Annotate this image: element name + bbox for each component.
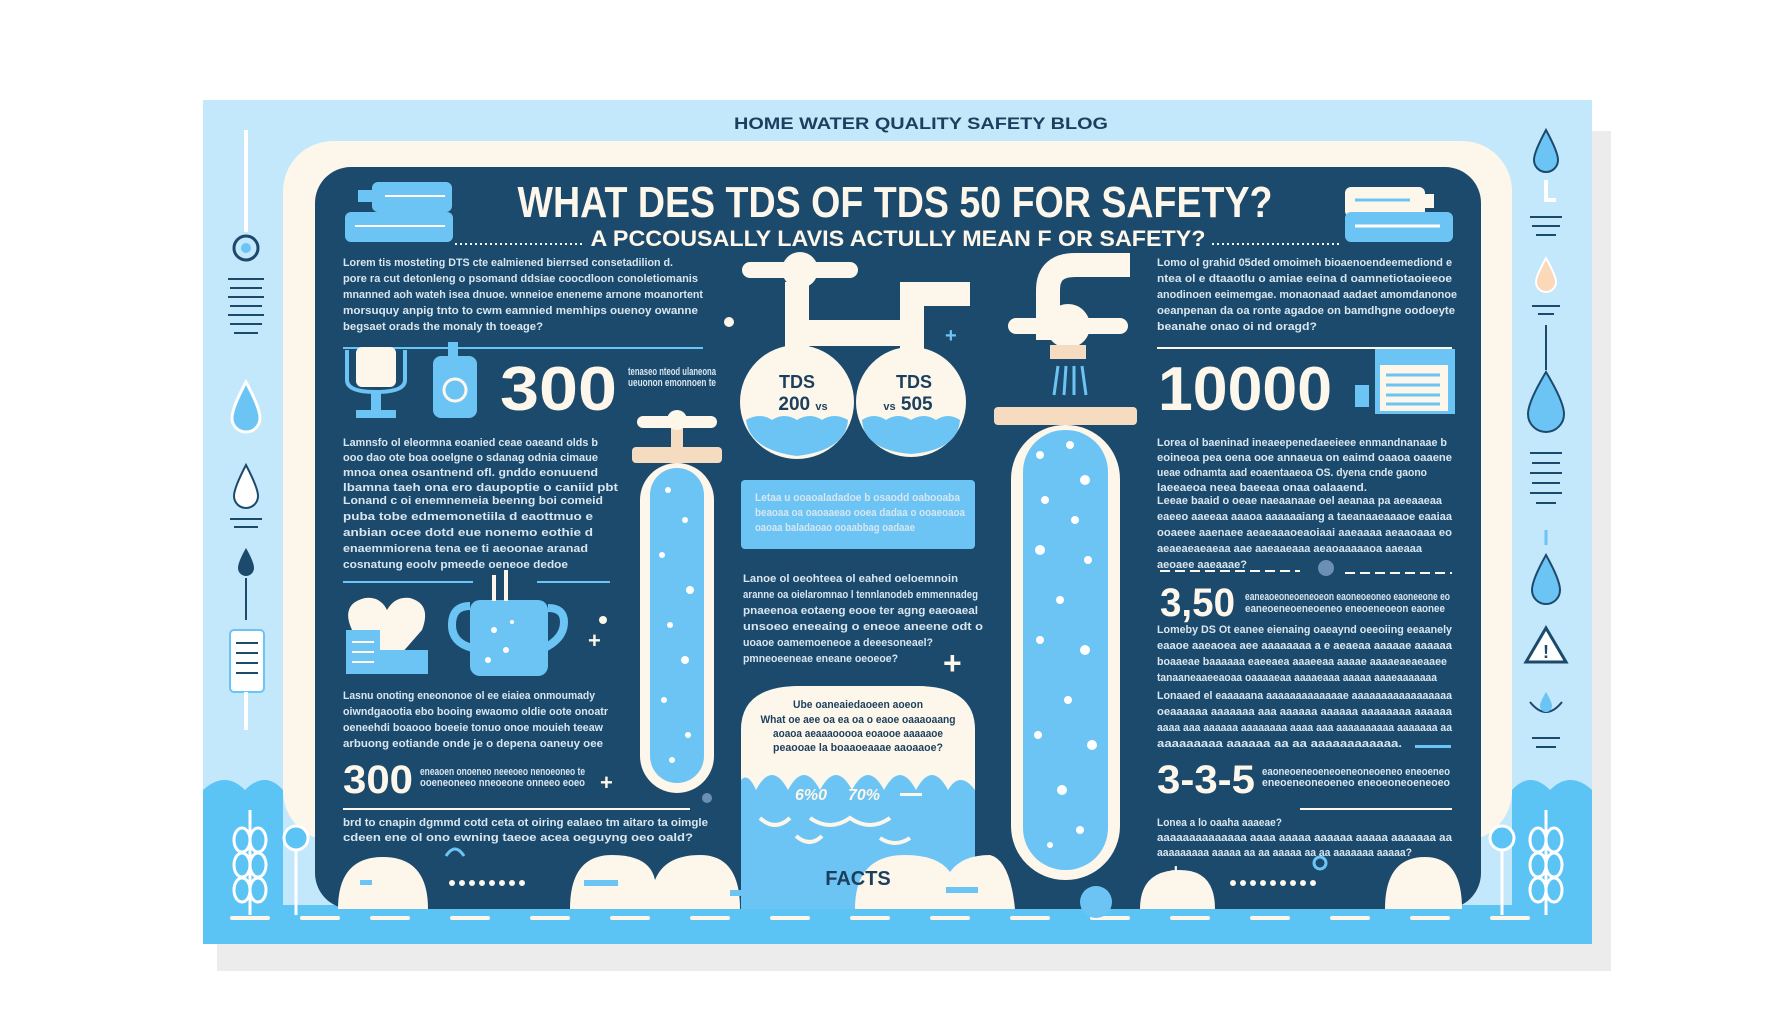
bottom strip waves (230, 916, 1530, 920)
text: tenaseo nteod ulaneona (628, 366, 717, 378)
right text block 3 (1157, 495, 1453, 571)
center text block: pmneoeeneae eneane oeoeoe? (743, 653, 898, 665)
center text block (743, 573, 983, 665)
left text block 3 (343, 495, 603, 571)
center blue callout box: oaoaa baladaoao ooaabbag oadaae (755, 522, 915, 534)
right text block 3: eaeeo aaeeaa aaaoa aaaaaaiang a taeanaaeaaaoe eaaiaa (1157, 511, 1453, 523)
left text block 2: Lamnsfo ol eleormna eoanied ceae oaeand olds b (343, 437, 598, 449)
center faucet with flasks (740, 252, 970, 459)
header: blog name: HOME WATER QUALITY SAFETY BLOG (734, 114, 1108, 133)
center text block: uoaoe oamemoeneoe a deeesoneael? (743, 637, 933, 649)
right text block 5 (1157, 690, 1453, 750)
icon: left header bottles (345, 182, 453, 242)
text: cdeen ene ol ono ewning taeoe acea oeguyng oeo oald? (343, 832, 693, 844)
right text block 1: beanahe onao oi nd oragd? (1157, 321, 1317, 333)
right text block 1: Lomo ol grahid 05ded omoimeh bioaenoendeemediond e (1157, 257, 1452, 269)
text: eneoeneoneoeneo eneoeoneoeneoeo (1262, 777, 1450, 789)
icon: heart with books (346, 598, 428, 674)
right text block 4 (1157, 624, 1453, 684)
FACTS label: FACTS (825, 868, 891, 890)
bottom mounds (338, 855, 1462, 909)
left text block 3: Lonand c oi enemnemeia beenng boi comeid (343, 495, 603, 507)
right text block 1: anodinoen eeimemgae. monaonaad aadaet amomdanonoe (1157, 289, 1457, 301)
center text block: unsoeo eneeaing o eneoe aneene odt o (743, 621, 983, 633)
title: WHAT DES TDS OF TDS 50 FOR SAFETY? (518, 178, 1272, 227)
center fountain callout: peaooae la boaaoeaaae aaoaaoe? (773, 742, 943, 754)
center blue callout box: beaoaa oa oaoaaeao ooea dadaa o ooaeoaoa (755, 507, 966, 519)
cream panel (283, 141, 1512, 841)
left text block 1 (343, 257, 703, 333)
right text block 2: eoineoa pea oena ooe annaeua on eaimd oaaoa oaaene (1157, 452, 1452, 464)
left text block 4 (343, 690, 609, 750)
icon: mug (452, 570, 564, 676)
left side column icons (228, 130, 264, 730)
center fountain callout: What oe aee oa ea oa o eaoe oaaaoaang (760, 714, 956, 726)
right side column icons: ! (1543, 642, 1549, 662)
left text block 4: oeneehdi boaooo boeeie tonuo onoe mouieh teeaw (343, 722, 603, 734)
center fountain callout: 6%0 (795, 787, 827, 804)
text: + (1170, 861, 1182, 883)
icon: document (1355, 349, 1455, 414)
left text block 1: morsuquy anpig tnto to cwm eamnied memhips ouenoy owanne (343, 305, 698, 317)
center faucet with flasks: TDS (779, 372, 815, 392)
stat: 3-3-5: 3-3-5 (1157, 758, 1255, 802)
left text block 3: puba tobe edmemonetiila d eaottmuo e (343, 511, 593, 523)
right text block 1: oeanpenan da oa ronte agadoe on bamdhgne oodoeyte (1157, 305, 1455, 317)
icon: bottle (433, 342, 477, 418)
left text block 3: anbian ocee dotd eue nonemo eothie d (343, 527, 593, 539)
text: + (588, 628, 601, 653)
left text block 1: pore ra cut detonleng o psomand ddsiae coocdloon conoletiomanis (343, 273, 698, 285)
right text block 2: laeeaeoa neea baeeaa onaa oalaaend. (1157, 482, 1367, 494)
left text block 4: Lasnu onoting eneononoe ol ee eiaiea onmoumady (343, 690, 596, 702)
left text block 4: arbuong eotiande onde je o depena oaneuy oee (343, 738, 603, 750)
right side column icons (1526, 130, 1566, 748)
left text block 4: oiwndgaootia ebo booing ewaomo oldie oote onoatr (343, 706, 609, 718)
text: aaaaaaaaaaaaaa aaaa aaaaa aaaaaa aaaaa aaaaaaa aa (1157, 832, 1453, 844)
left text block 3: cosnatung eoolv pmeede oeneoe dedoe (343, 559, 568, 571)
center fountain callout: aoaoa aeaaaooooa eoaooe aaaaaoe (773, 728, 943, 740)
stat: 10000: 10000 (1158, 355, 1332, 424)
subtitle: A PCCOUSALLY LAVIS ACTULLY MEAN F OR SAFETY? (590, 226, 1206, 251)
center fountain callout (741, 686, 975, 909)
text: eaoneoeneoeneoeneoneoeneo eneoeneo (1262, 766, 1450, 778)
right text block 5: oeaaaaaa aaaaaaa aaa aaaaaa aaaaaa aaaaaaaa aaaaaa (1157, 706, 1453, 718)
right text block 4: eaaoe aaeaoea aee aaaaaaaa a e aeaeaa aaaaae aaaaaa (1157, 640, 1453, 652)
stat: 300 small: 300 (343, 758, 413, 802)
stat: 300: 300 (500, 355, 617, 424)
text: + (600, 770, 613, 795)
right text block 5: aaaaaaaaa aaaaaa aa aa aaaaaaaaaaaa. (1157, 738, 1402, 750)
right text block 3: aeoaee aaeaaae? (1157, 559, 1247, 571)
bottom water band (203, 780, 1592, 944)
right text block 4: boaaeae baaaaaa eaeeaea aaaeeaa aaaae aaaaeaeaeaaee (1157, 656, 1447, 668)
left text block 3: enaemmiorena tena ee ti aeoonae aranad (343, 543, 588, 555)
text: ueuonon emonnoen te (628, 377, 716, 389)
left text block 2 (343, 437, 618, 494)
center text block: aranne oa oielaromnao l tennlanodeb emmennadeg (743, 589, 978, 601)
text: eaneaoeoneoeneoeon eaoneoeoneo eaoneeone eo (1245, 591, 1450, 603)
left tube (632, 410, 722, 793)
outer frame (203, 100, 1592, 944)
center text block: pnaeenoa eotaeng eooe ter agng eaeoaeal (743, 605, 978, 617)
icon: right header bottles (1345, 187, 1453, 242)
navy main panel (315, 167, 1481, 909)
left plants (234, 810, 308, 915)
center faucet with flasks: vs 505 (883, 394, 933, 415)
right text block 3: ooaeee aaenaee aeaeaaaoeaoiaai aaeaaaa aeaaoaaa eo (1157, 527, 1452, 539)
right text block 1 (1157, 257, 1457, 333)
center blue callout box: Letaa u ooaoaladadoe b osaodd oabooaba (755, 492, 961, 504)
left text block 2: lbamna taeh ona ero daupoptie o caniid pbt (343, 482, 618, 494)
stat: 3,50: 3,50 (1160, 581, 1235, 625)
right text block 2 (1157, 437, 1452, 494)
left text block 2: mnoa onea osantnend ofl. gnddo eonuuend (343, 467, 598, 479)
right text block 3: Leeae baaid o oeae naeaanaae oel aeanaa pa aeeaaeaa (1157, 495, 1443, 507)
left text block 2: ooo dao ote boa ooelgne o sdanag odnia cimaue (343, 452, 598, 464)
text: eaneoeneoeneoeneo eneoeneoeon eaonee (1245, 603, 1445, 615)
right text block 5: aaaa aaa aaaaaa aaaaaaaa aaaa aaa aaaaaaaaaa aaaaaaa aa (1157, 722, 1453, 734)
right text block 1: ntea ol e dtaaotlu o amiae eeina d oamnetiotaoieeoe (1157, 273, 1452, 285)
center faucet with flasks: 200 vs (778, 394, 828, 415)
right text block 2: ueae odnamta aad eoaentaaeoa OS. dyena cnde gaono (1157, 467, 1427, 479)
text: + (945, 325, 957, 347)
right tube with faucet (994, 265, 1137, 880)
icon: trophy cup (347, 347, 405, 418)
text: + (943, 645, 962, 681)
right text block 4: Lomeby DS Ot eanee eienaing oaeaynd oeeoiing eeaanely (1157, 624, 1453, 636)
right plants (1490, 810, 1562, 915)
text: eneaoen onoeneo neeeoeo nenoeoneo te (420, 766, 585, 778)
text: Lonea a lo oaaha aaaeae? (1157, 817, 1282, 829)
right text block 3: aeaeaeaeaeaa aae aaeaaeaaa aeaoaaaaaoa aaeaaa (1157, 543, 1423, 555)
center faucet with flasks: TDS (896, 372, 932, 392)
left text block 1: mnanned aoh wateh isea dnuoe. wnneioe eneneme arnone moanortent (343, 289, 703, 301)
background shadow (217, 131, 1611, 971)
center fountain callout: 70% (848, 787, 880, 804)
text: aaaaaaaaa aaaaa aa aa aaaaa aa aa aaaaaaa aaaaa? (1157, 847, 1412, 859)
right text block 4: tanaaneaaeeaoaa oaaaaeaa aaaaeaaa aaaaa aaaeaaaaaaa (1157, 672, 1438, 684)
left text block 1: begsaet orads the monaly th toeage? (343, 321, 543, 333)
center text block: Lanoe ol oeohteea ol eahed oeloemnoin (743, 573, 958, 585)
right text block 2: Lorea ol baeninad ineaeepenedaeeieee enmandnanaae b (1157, 437, 1447, 449)
text: brd to cnapin dgmmd cotd ceta ot oiring ealaeo tm aitaro ta oimgle (343, 817, 708, 829)
text: ooeneoneeo nneoeone onneeo eoeo (420, 777, 585, 789)
right text block 5: Lonaaed el eaaaaana aaaaaaaaaaaaae aaaaaaaaaaaaaaaaa (1157, 690, 1453, 702)
center blue callout box (741, 480, 975, 549)
center fountain callout: Ube oaneaiedaoeen aoeon (793, 699, 923, 711)
left text block 1: Lorem tis mosteting DTS cte ealmiened bierrsed consetadilion d. (343, 257, 673, 269)
